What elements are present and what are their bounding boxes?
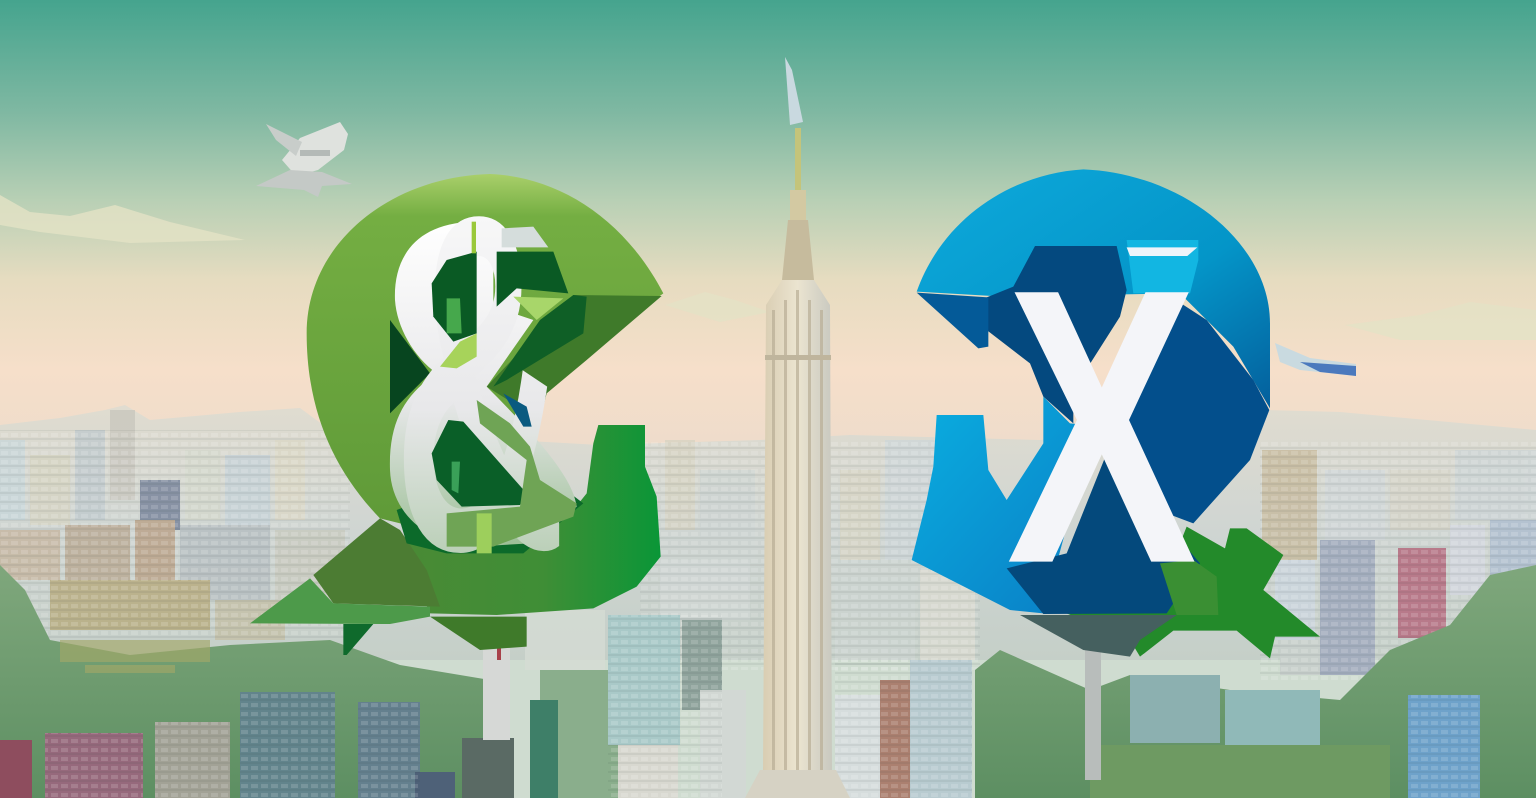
trees left [0,565,490,798]
ampersand letterform: & [393,114,567,651]
X letterform: X [1006,208,1198,645]
airplane top left [256,122,352,197]
upper right counter [497,252,568,307]
spikes [343,624,373,655]
trees right [975,565,1536,798]
blue disc [917,169,1270,408]
highlight band [1127,240,1198,293]
hazy distant skyline [0,405,1536,680]
upper right wedge [487,295,662,420]
upper counter [432,252,477,342]
trees centre [540,670,620,798]
yellow buildings among trees [60,640,210,673]
dark lower left [313,518,440,607]
highlights [513,297,563,320]
clouds [0,195,1536,340]
airplane right [1275,343,1356,376]
tower [745,57,850,798]
tail [250,578,430,624]
green symbol [250,114,663,655]
left block [912,397,1107,613]
dark right diamond [1113,298,1269,523]
dark blue upper [987,246,1127,423]
green symbol pole [483,620,510,740]
lower counter [432,420,527,507]
foreground buildings [0,615,1480,798]
green disc [307,174,663,527]
lower body [400,425,661,615]
green star behind [1067,527,1320,658]
blue symbol [912,169,1320,658]
lower triangle [1007,453,1200,614]
blue symbol pole [1085,612,1101,780]
sky background [0,0,1536,560]
